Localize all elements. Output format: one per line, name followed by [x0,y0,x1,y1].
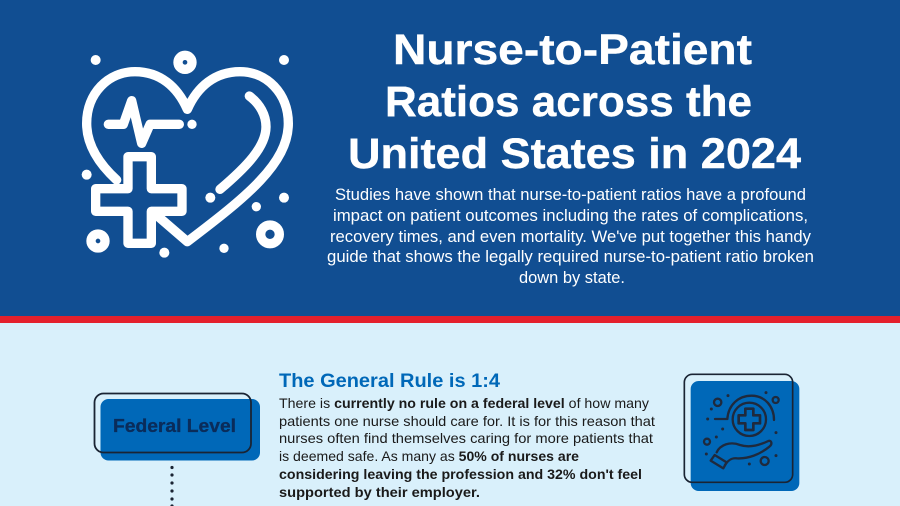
heading: the general rule: The General Rule is 1:4 [279,370,500,392]
title [348,26,801,178]
intro text: down by state. [519,269,625,287]
red divider band [0,316,900,323]
paragraph: general rule: considering leaving the profession and 32% don't feel [279,466,642,482]
federal level badge: Federal Level [113,415,236,436]
intro text [327,186,814,287]
paragraph: general rule [279,395,655,500]
paragraph: general rule: supported by their employer. [279,484,480,500]
header background [0,0,900,316]
intro text: Studies have shown that nurse-to-patient ratios have a profound [335,186,806,204]
paragraph: general rule: nurses often find themselves caring for more patients that [279,430,653,446]
title: Nurse-to-Patient [393,26,752,74]
icon: hand holding medical cross [684,374,799,491]
dotted connector [170,466,174,506]
intro text: guide that shows the legally required nurse-to-patient ratio broken [327,248,814,266]
paragraph: general rule: patients one nurse should care for. It is for this reason that [279,413,655,429]
intro text: impact on patient outcomes including the rates of complications, [333,207,808,225]
title: Ratios across the [385,78,752,126]
paragraph: general rule: There is currently no rule on a federal level of how many [279,395,649,411]
title: United States in 2024 [348,130,801,178]
paragraph: general rule: is deemed safe. As many as 50% of nurses are [279,448,579,464]
icon: heart with pulse and medical cross [82,55,289,258]
intro text: recovery times, and even mortality. We've put together this handy [330,228,812,246]
federal level badge [94,394,260,460]
